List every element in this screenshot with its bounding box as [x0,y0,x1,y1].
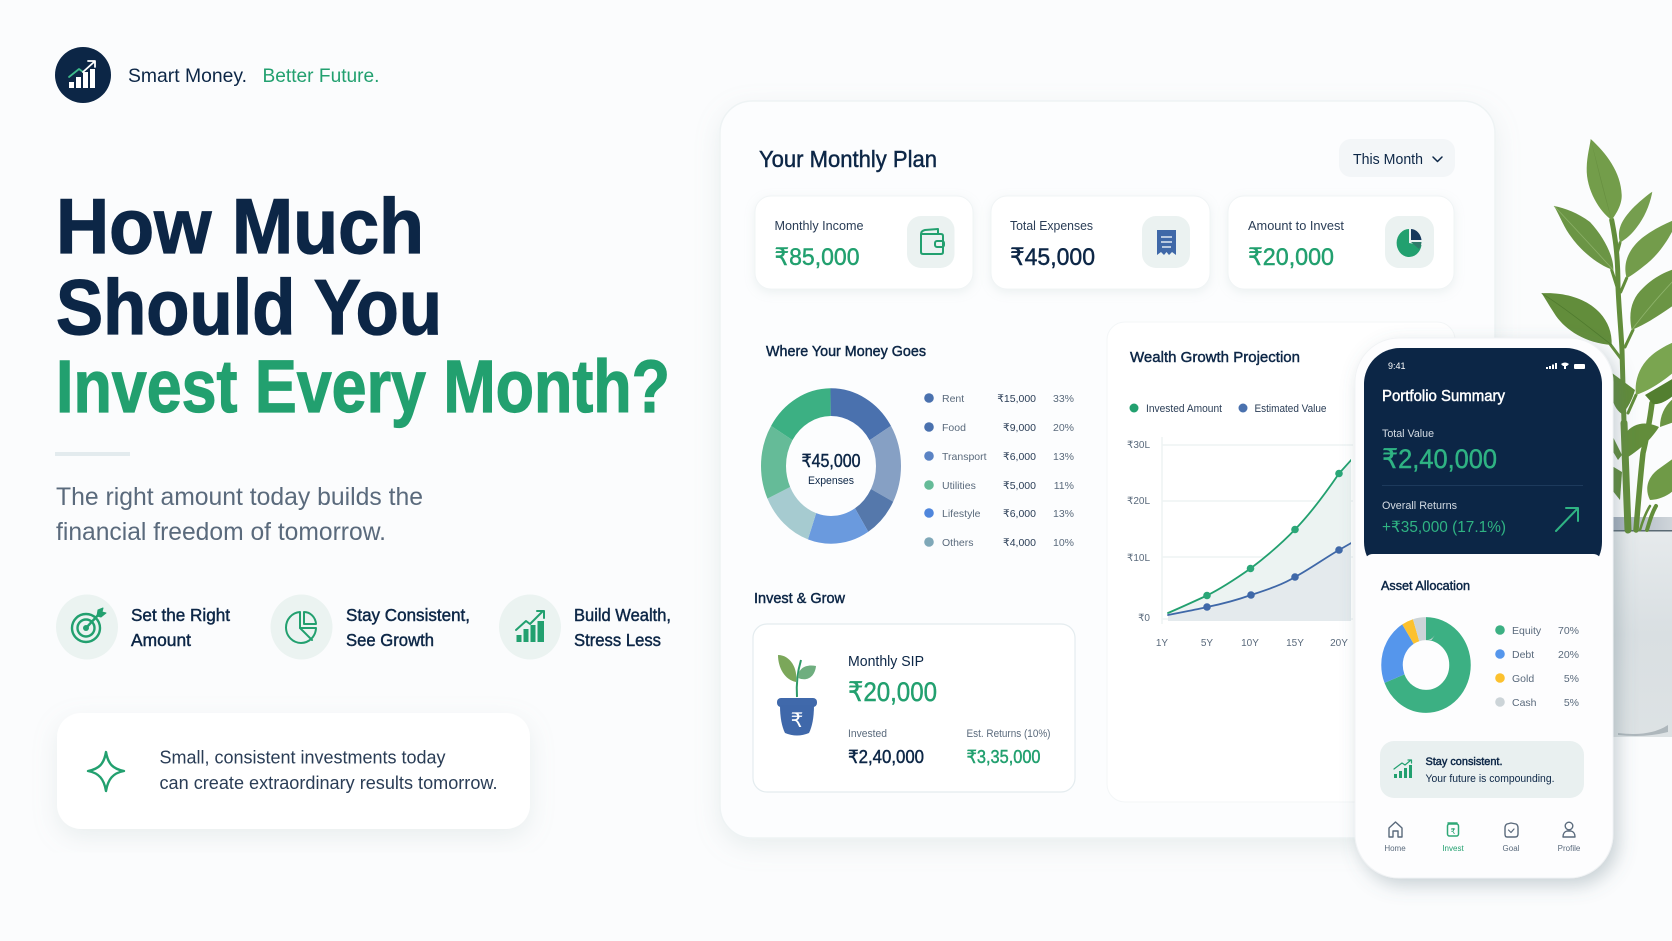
nav: invest [1442,823,1464,853]
pot [1614,517,1672,737]
line chart: ₹30L [1127,440,1150,451]
banner: stay consistent [1380,741,1584,798]
card: amount to invest: ₹20,000 [1248,244,1334,271]
nav: home [1384,822,1406,853]
phone: asset allocation: Asset Allocation [1381,579,1470,593]
card: monthly sip: Monthly SIP [848,653,924,670]
leaf [1630,269,1672,330]
icon: sparkle [88,752,124,791]
leaf [1645,378,1672,404]
callout [57,713,530,829]
feature: set the right amount: Amount [131,630,191,650]
legend: expenses: Food [942,422,966,434]
legend: allocation [1495,625,1579,709]
leaf [1628,424,1659,456]
feature: set the right amount [56,594,230,660]
legend: expenses: Transport [942,451,987,463]
subtitle [56,483,423,546]
panel: monthly plan [720,101,1613,878]
legend: expenses: 13% [1053,451,1074,463]
legend: expenses: 20% [1053,422,1074,434]
nav: home: Home [1384,844,1406,853]
card: total expenses [991,196,1210,289]
feature: set the right amount: Set the Right [131,605,230,625]
line chart: 20Y [1330,638,1348,649]
legend: expenses: ₹5,000 [1003,480,1036,492]
donut chart: expenses: ₹45,000 [802,451,860,471]
legend: expenses: 13% [1053,508,1074,520]
legend: growth: Invested Amount [1146,403,1222,415]
legend: expenses: 33% [1053,393,1074,405]
feature: build wealth: Stress Less [574,630,661,650]
section: where your money goes: Where Your Money Goes [766,344,926,360]
legend: expenses: Rent [942,393,964,405]
legend: expenses: ₹4,000 [1003,537,1036,549]
callout: can create extraordinary results tomorrow. [160,773,498,793]
leaf [1619,192,1652,243]
nav: goal: Goal [1503,844,1520,853]
card: monthly income: Monthly Income [774,218,864,233]
legend: allocation: Cash [1512,697,1537,709]
title: Invest Every Month? [56,345,670,428]
section: invest and grow [753,590,1075,792]
phone header: portfolio summary: Total Value [1382,428,1434,440]
line chart [1127,437,1353,649]
title: Should You [56,263,442,351]
legend: expenses: 11% [1054,480,1074,492]
feature: stay consistent [270,594,470,660]
line chart: ₹0 [1138,613,1150,624]
nav: invest: Invest [1442,844,1464,853]
tagline [128,65,380,87]
icon: status bar [1546,362,1585,369]
card: total expenses: ₹45,000 [1010,244,1095,271]
card: total expenses: Total Expenses [1010,218,1093,233]
logo and tagline [55,47,380,103]
legend: expenses: ₹9,000 [1003,422,1036,434]
section: where your money goes [766,344,1074,549]
icon: pie chart [286,612,316,643]
feature: build wealth [499,594,671,660]
leaves [1542,139,1672,500]
legend: allocation: 5% [1564,697,1579,709]
legend: allocation: Gold [1512,673,1534,685]
card: monthly sip: Invested [848,728,887,740]
legend: expenses: Others [942,537,974,549]
card: amount to invest [1228,196,1454,289]
icon: target [72,608,106,642]
leaf [1542,293,1612,345]
nav: profile: Profile [1558,844,1581,853]
line chart: ₹20L [1127,496,1150,507]
nav: profile [1558,822,1581,853]
dropdown: this month: This Month [1353,152,1423,168]
card: monthly sip: Est. Returns (10%) [966,728,1050,740]
icon: wallet [921,229,944,254]
icon: plant pot: ₹ [791,710,803,732]
leaf [1614,467,1622,500]
feature: build wealth: Build Wealth, [574,605,671,625]
phone [1355,338,1613,878]
line chart: 1Y [1156,638,1168,649]
plant [1542,139,1672,737]
icon: up arrow [1556,508,1578,531]
phone header: portfolio summary: Portfolio Summary [1382,388,1505,405]
subtitle: financial freedom of tomorrow. [56,518,386,546]
icon: logo chart [55,47,111,103]
leaf [1636,342,1672,395]
phone header: portfolio summary: Overall Returns [1382,500,1457,512]
dropdown: this month [1339,139,1455,177]
callout: Small, consistent investments today [160,748,446,768]
title [56,182,670,428]
card: monthly sip: ₹2,40,000 [848,747,924,767]
legend: expenses: 10% [1053,537,1074,549]
title: How Much [56,182,424,270]
card: monthly sip [753,624,1075,792]
legend: growth: Estimated Value [1254,403,1326,415]
banner: stay consistent: Your future is compounding. [1426,773,1554,785]
card: amount to invest: Amount to Invest [1248,218,1344,233]
heading: your monthly plan: Your Monthly Plan [759,146,937,172]
legend: allocation: 5% [1564,673,1579,685]
donut chart: expenses [774,402,888,530]
phone header: portfolio summary: ₹2,40,000 [1382,444,1497,474]
leaf [1612,373,1635,414]
leaf [1614,438,1622,460]
nav: goal [1503,823,1520,853]
icon: bars [516,611,544,642]
legend: expenses: ₹15,000 [997,393,1036,405]
leaf [1647,458,1672,500]
leaf [1660,398,1672,427]
card: monthly income [755,196,973,289]
card: monthly income: ₹85,000 [774,244,860,271]
phone: asset allocation [1381,579,1579,709]
leaf [1625,220,1672,278]
phone header: portfolio summary: +₹35,000 (17.1%) [1382,519,1506,536]
line chart: 10Y [1241,638,1259,649]
subtitle: The right amount today builds the [56,483,423,511]
panel: wealth growth projection [1107,322,1455,802]
donut chart: expenses: Expenses [808,475,854,487]
donut chart: allocation [1392,629,1460,701]
icon: growth [1394,760,1412,778]
legend: expenses: Lifestyle [942,508,981,520]
tagline: Better Future. [262,65,380,87]
nav: invest: ₹ [1450,827,1456,836]
legend: expenses: Utilities [942,480,976,492]
stems [1607,220,1656,530]
icon: plant pot [777,655,817,736]
tagline: Smart Money. [128,65,247,87]
icon: receipt [1157,230,1176,255]
legend: allocation: Equity [1512,625,1542,637]
line chart: 5Y [1201,638,1213,649]
legend: allocation: Debt [1512,649,1534,661]
icon: pie [1397,229,1422,257]
leaf [1554,206,1613,270]
line chart: 15Y [1286,638,1304,649]
bottom navigation [1384,822,1581,853]
legend: growth [1130,403,1326,415]
feature: stay consistent: Stay Consistent, [346,605,470,625]
panel: wealth growth projection: Wealth Growth Projection [1130,349,1300,366]
section: invest and grow: Invest & Grow [754,590,845,607]
feature: stay consistent: See Growth [346,630,434,650]
legend: expenses: ₹6,000 [1003,451,1036,463]
line chart: ₹10L [1127,553,1150,564]
phone header: portfolio summary: 9:41 [1388,361,1406,371]
card: monthly sip: ₹3,35,000 [966,747,1040,767]
phone header: portfolio summary [1364,348,1602,556]
legend: expenses [924,393,1074,549]
legend: expenses: ₹6,000 [1003,508,1036,520]
card: monthly sip: ₹20,000 [848,677,937,707]
banner: stay consistent: Stay consistent. [1426,756,1502,768]
leaf [1587,139,1622,220]
legend: allocation: 20% [1558,649,1579,661]
legend: allocation: 70% [1558,625,1579,637]
